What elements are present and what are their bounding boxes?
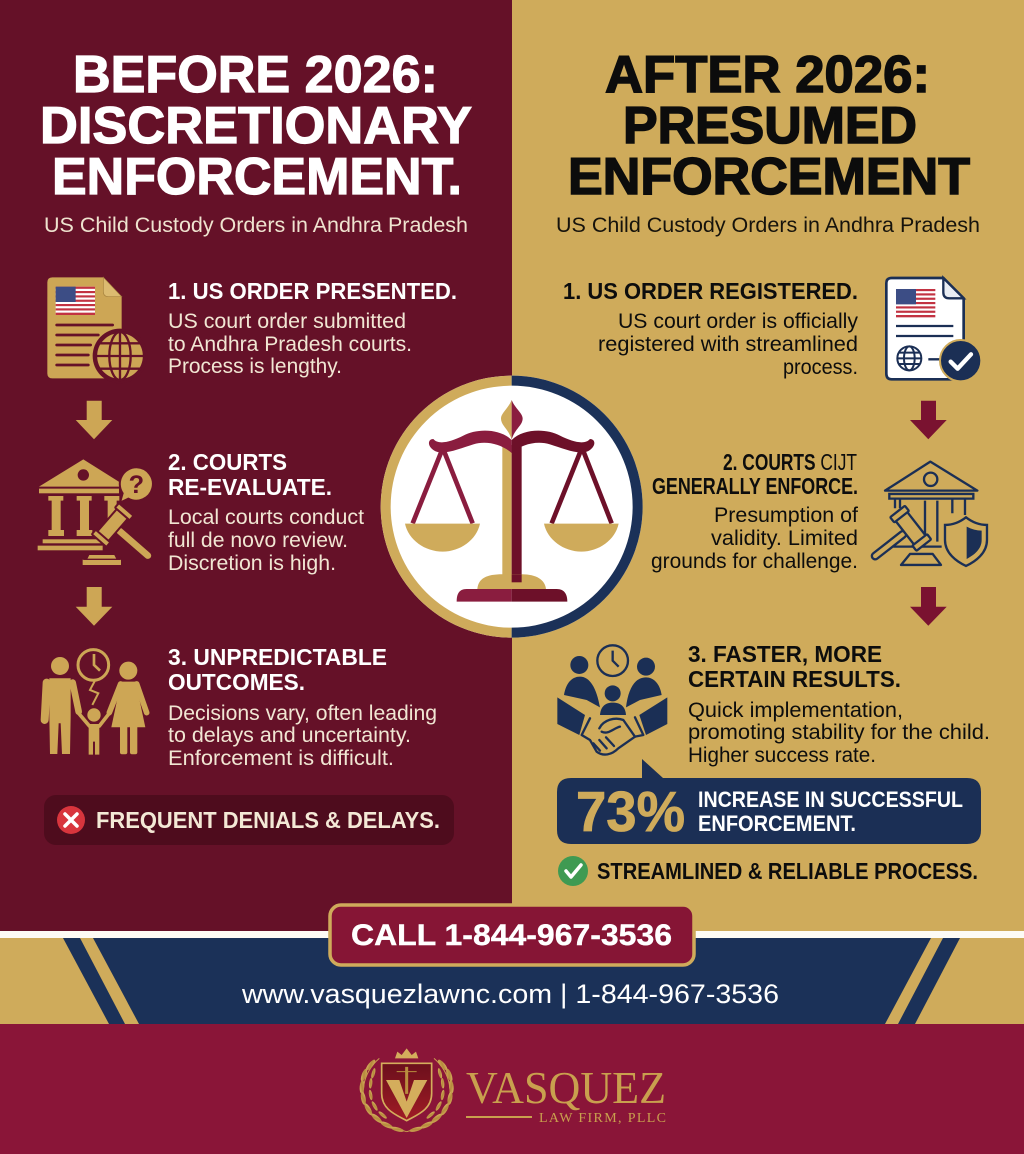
step 1: US order presented: US court order submitted bbox=[168, 310, 406, 333]
footer: logo band bbox=[0, 1024, 1024, 1154]
heading: before 2026: DISCRETIONARY bbox=[40, 97, 472, 155]
step 2: courts generally enforce: validity. Limited bbox=[711, 527, 858, 550]
step 2: courts generally enforce bbox=[651, 449, 858, 573]
footer band bbox=[0, 905, 1024, 1024]
step 2: courts generally enforce: grounds for challenge. bbox=[651, 550, 858, 573]
step 3: unpredictable outcomes: to delays and uncertainty. bbox=[168, 724, 411, 747]
panel: after 2026 bbox=[512, 0, 1024, 931]
step 1: US order presented bbox=[168, 278, 457, 378]
icon: central scales of justice bbox=[381, 376, 643, 638]
icon: courthouse, gavel and question mark: ? bbox=[129, 471, 144, 499]
step 3: faster, more certain results: CERTAIN RESULTS. bbox=[688, 666, 901, 692]
heading: before 2026: ENFORCEMENT. bbox=[52, 148, 462, 206]
subtitle: after: US Child Custody Orders in Andhra Pradesh bbox=[556, 214, 980, 237]
heading: before 2026 bbox=[40, 46, 472, 206]
logo: wordmark: VASQUEZ bbox=[466, 1062, 666, 1113]
callout: frequent denials and delays: FREQUENT DENIALS & DELAYS. bbox=[96, 807, 440, 833]
step 3: unpredictable outcomes bbox=[168, 644, 437, 770]
heading: after 2026: ENFORCEMENT bbox=[568, 148, 970, 206]
step 1: US order presented: to Andhra Pradesh courts. bbox=[168, 333, 412, 356]
stat label: ENFORCEMENT. bbox=[698, 811, 856, 836]
button: call phone number bbox=[330, 905, 694, 965]
callout: frequent denials and delays bbox=[44, 795, 454, 845]
step 3: faster, more certain results: Quick implementation, bbox=[688, 699, 903, 722]
icon: document with flag and globe bbox=[47, 277, 147, 383]
step 2: courts generally enforce: Presumption of bbox=[714, 504, 858, 527]
subtitle: before: US Child Custody Orders in Andhra Pradesh bbox=[44, 214, 468, 237]
stat label: INCREASE IN SUCCESSFUL bbox=[698, 787, 963, 812]
step 1: US order registered: registered with streamlined bbox=[598, 333, 858, 356]
logo: wordmark: LAW FIRM, PLLC bbox=[539, 1111, 666, 1126]
step 2: courts re-evaluate bbox=[168, 449, 364, 575]
icon: registered document with check badge bbox=[886, 278, 981, 381]
step 3: unpredictable outcomes: Decisions vary, often leading bbox=[168, 702, 437, 725]
heading: before 2026: BEFORE 2026: bbox=[73, 46, 438, 104]
step 2: courts re-evaluate: full de novo review. bbox=[168, 529, 348, 552]
step 2: courts generally enforce: GENERALLY ENFORCE. bbox=[652, 473, 858, 499]
arrow: step 1 to 2 bbox=[76, 401, 112, 439]
step 2: courts re-evaluate: Discretion is high. bbox=[168, 552, 336, 575]
stat label bbox=[698, 787, 963, 836]
heading: after 2026: PRESUMED bbox=[623, 97, 917, 155]
step 2: courts generally enforce: 2. COURTS CIJT bbox=[723, 449, 857, 475]
icon: courthouse, gavel and question mark bbox=[38, 459, 164, 573]
arrow: right step 1 to 2 bbox=[910, 401, 947, 439]
step 1: US order registered: process. bbox=[783, 356, 858, 379]
icon: people, clock and handshake bbox=[557, 645, 667, 755]
heading: after 2026 bbox=[568, 46, 970, 206]
contact line: www.vasquezlawnc.com | 1-844-967-3536 bbox=[241, 979, 779, 1009]
step 1: US order presented: 1. US ORDER PRESENTED. bbox=[168, 278, 457, 304]
step 3: faster, more certain results bbox=[688, 641, 990, 767]
logo: crest bbox=[359, 1048, 454, 1133]
step 3: faster, more certain results: 3. FASTER, MORE bbox=[688, 641, 882, 667]
step 3: faster, more certain results: Higher success rate. bbox=[688, 744, 876, 767]
button: call phone number: CALL 1-844-967-3536 bbox=[351, 919, 672, 952]
step 3: unpredictable outcomes: 3. UNPREDICTABLE bbox=[168, 644, 387, 670]
step 2: courts re-evaluate: RE-EVALUATE. bbox=[168, 474, 332, 500]
step 3: unpredictable outcomes: OUTCOMES. bbox=[168, 669, 305, 695]
callout: 73% increase in successful enforcement bbox=[557, 759, 981, 844]
callout: streamlined and reliable process: STREAMLINED & RELIABLE PROCESS. bbox=[597, 858, 978, 884]
step 3: faster, more certain results: promoting stability for the child. bbox=[688, 721, 990, 744]
step 1: US order registered: 1. US ORDER REGISTERED. bbox=[563, 278, 858, 304]
panel: before 2026 bbox=[0, 0, 512, 931]
stat: 73%: 73% bbox=[576, 780, 685, 844]
arrow: step 2 to 3 bbox=[76, 587, 112, 626]
step 1: US order registered: US court order is officially bbox=[618, 310, 858, 333]
arrow: right step 2 to 3 bbox=[910, 587, 947, 626]
step 3: unpredictable outcomes: Enforcement is difficult. bbox=[168, 747, 394, 770]
step 2: courts re-evaluate: Local courts conduct bbox=[168, 506, 364, 529]
step 2: courts re-evaluate: 2. COURTS bbox=[168, 449, 287, 475]
icon: family with clock and crack bbox=[45, 650, 147, 755]
icon: courthouse, gavel and shield bbox=[859, 462, 987, 575]
heading: after 2026: AFTER 2026: bbox=[605, 46, 930, 104]
step 1: US order registered bbox=[563, 278, 858, 379]
step 1: US order presented: Process is lengthy. bbox=[168, 355, 342, 378]
